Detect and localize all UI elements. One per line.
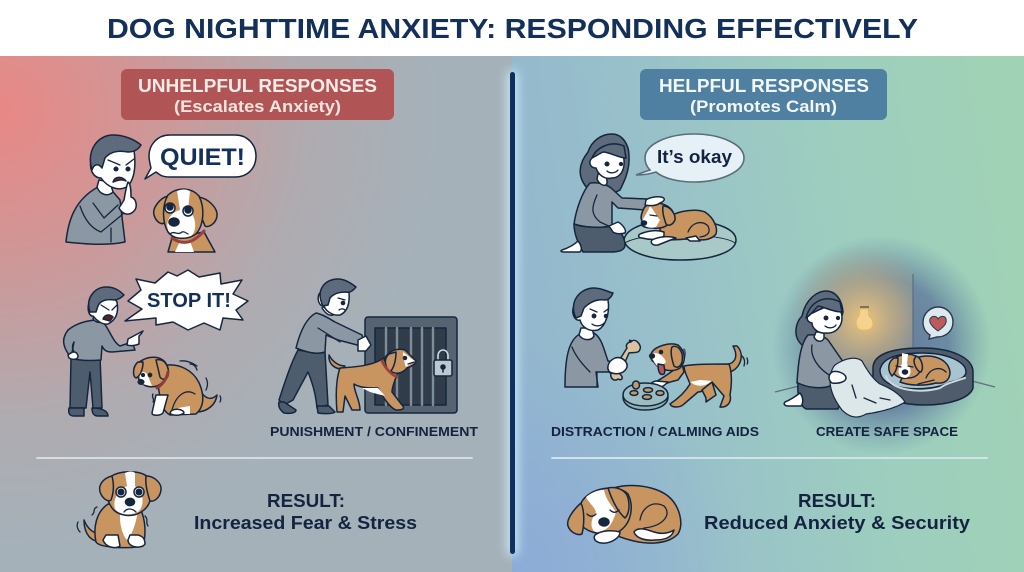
heading: helpful responses: (Promotes Calm): [690, 98, 837, 116]
header band: [0, 0, 1024, 56]
result text: increased fear and stress: [194, 491, 417, 533]
icon: dog being pushed into crate: [329, 349, 416, 412]
result text: increased fear and stress: RESULT:: [267, 491, 345, 511]
label: distraction / calming aids: DISTRACTION / CALMING AIDS: [551, 424, 759, 439]
panel: unhelpful responses: [0, 56, 512, 572]
divider right: [551, 457, 988, 459]
label: punishment / confinement: PUNISHMENT / CONFINEMENT: [270, 424, 478, 439]
heading: unhelpful responses: [121, 69, 394, 120]
icon: light bulb: [856, 307, 873, 330]
panel background: unhelpful: [0, 56, 512, 572]
icon: trembling dog result: [77, 472, 161, 548]
icon: heart thought bubble: [923, 307, 953, 339]
heading: helpful responses: HELPFUL RESPONSES: [659, 75, 869, 96]
icon: locked crate: [365, 317, 457, 413]
icon: happy dog with puzzle bowl: [650, 344, 748, 407]
result text: reduced anxiety and security: RESULT:: [798, 491, 876, 511]
label: create safe space: CREATE SAFE SPACE: [816, 424, 958, 439]
icon: worried dog head: [154, 189, 217, 252]
panel background: helpful: [512, 56, 1024, 572]
callout: It's okay speech bubble: [636, 134, 744, 182]
panel: helpful responses: [512, 56, 1024, 572]
icon: man shushing: [66, 135, 141, 244]
icon: cowering dog: [134, 357, 221, 415]
callout: QUIET! speech bubble: [145, 135, 256, 179]
result text: increased fear and stress: Increased Fear & Stress: [194, 513, 417, 533]
icon: man pushing dog to crate: [279, 279, 371, 414]
heading: unhelpful responses: UNHELPFUL RESPONSES: [138, 75, 377, 96]
icon: woman petting dog on cushion: [561, 134, 736, 260]
callout: STOP IT! burst: [125, 270, 248, 330]
icon: woman spreading blanket: [784, 291, 905, 417]
callout: QUIET! speech bubble: QUIET!: [160, 144, 245, 171]
callout: STOP IT! burst: STOP IT!: [147, 290, 231, 312]
heading: unhelpful responses: (Escalates Anxiety): [174, 98, 341, 116]
result text: reduced anxiety and security: [704, 491, 970, 533]
icon: man offering bone: [565, 288, 640, 387]
center divider: [507, 70, 518, 556]
icon: cozy dog bed with sleeping dog: [873, 348, 973, 405]
divider left: [36, 457, 473, 459]
result text: reduced anxiety and security: Reduced Anxiety & Security: [704, 513, 970, 533]
icon: sleeping dog result: [568, 486, 681, 543]
icon: treat puzzle bowl: [623, 381, 668, 410]
safe room glow: [772, 235, 995, 455]
callout: It's okay speech bubble: It’s okay: [657, 146, 733, 167]
icon: man pointing and yelling: [64, 287, 143, 416]
heading: helpful responses: [640, 69, 887, 120]
title: DOG NIGHTTIME ANXIETY: RESPONDING EFFECTIVELY: [107, 13, 918, 44]
